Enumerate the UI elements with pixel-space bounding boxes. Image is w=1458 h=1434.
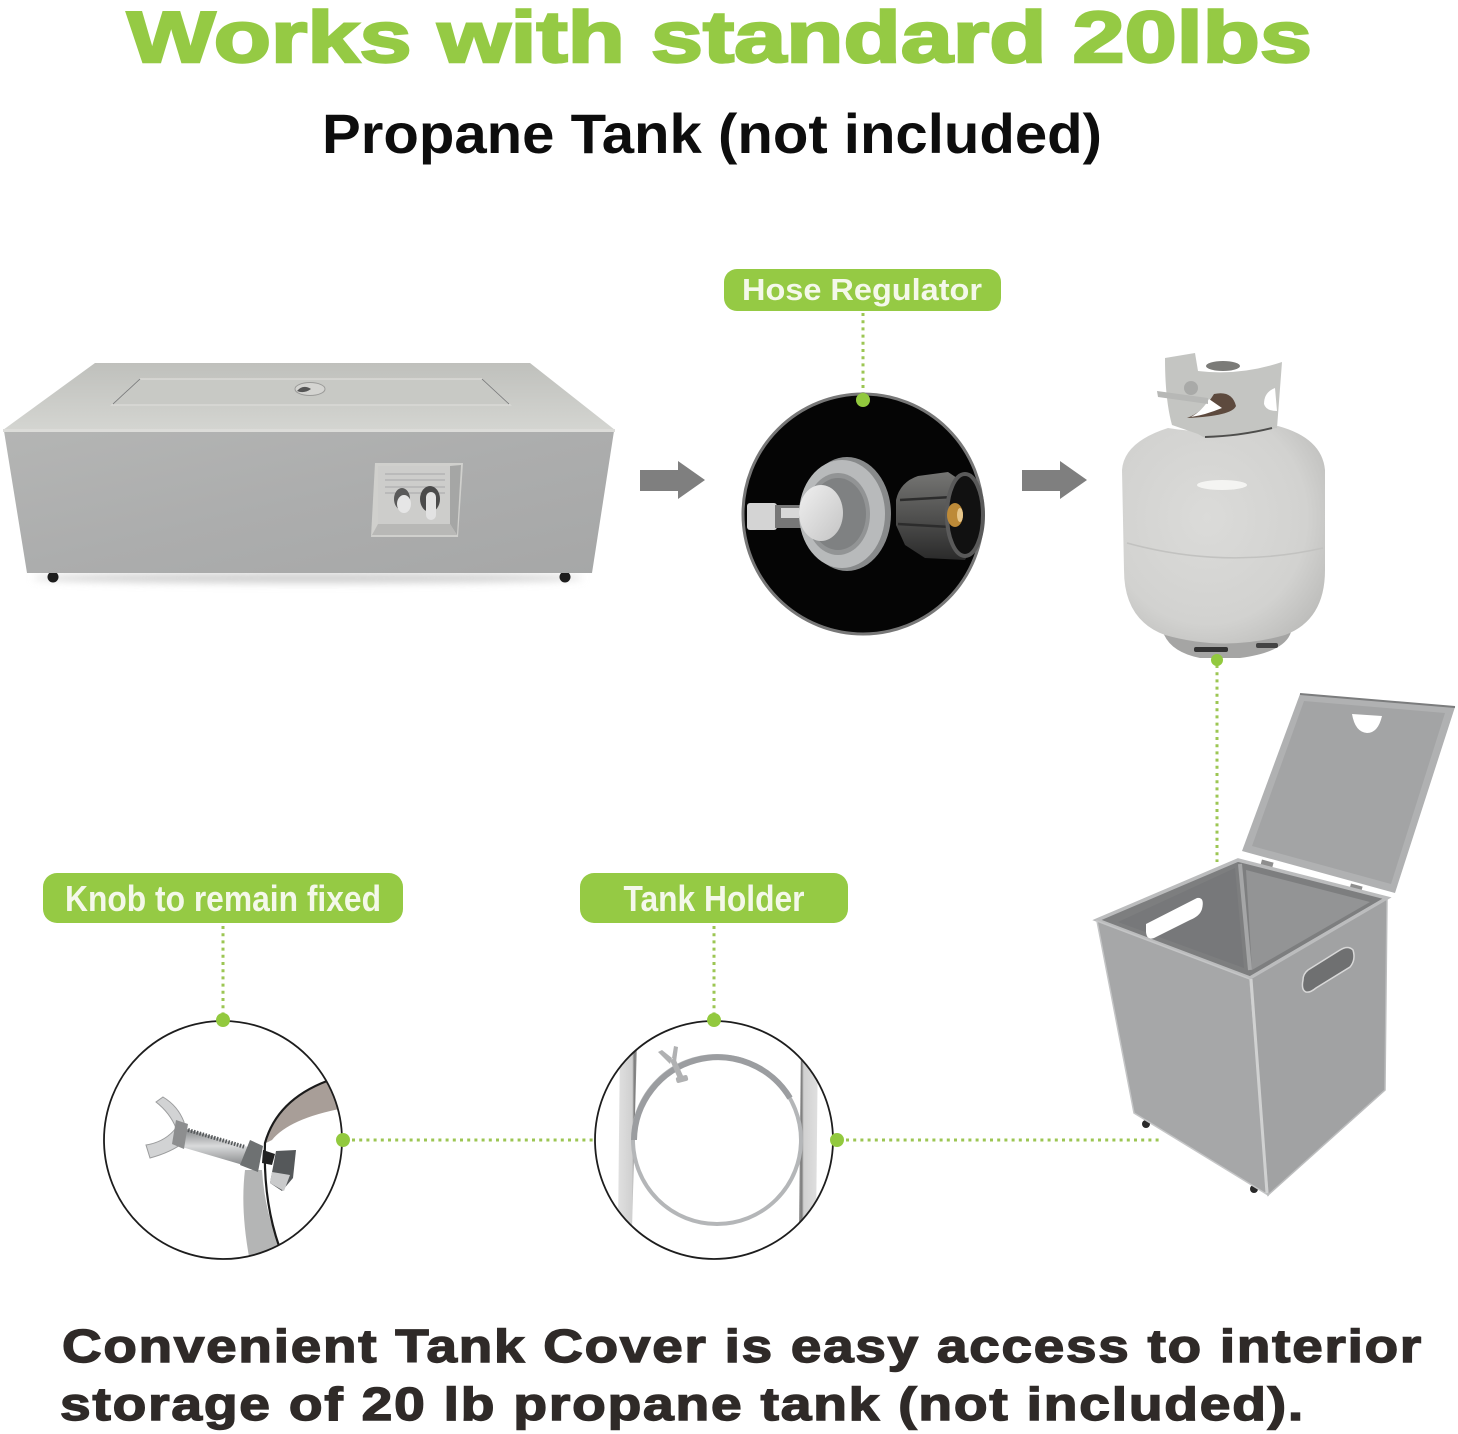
box right face bbox=[1250, 899, 1387, 1195]
fire pit table bbox=[3, 363, 615, 583]
connector: knob label to knob circle bbox=[222, 926, 224, 1016]
regulator body bbox=[799, 457, 891, 571]
connector: label to regulator bbox=[862, 313, 864, 398]
tank body bbox=[1122, 426, 1325, 644]
right handle slot bbox=[1302, 948, 1354, 992]
wing bolt bbox=[146, 1097, 296, 1191]
tank cover box bbox=[1097, 694, 1455, 1195]
hose fitting bbox=[747, 503, 803, 530]
subtitle: Propane Tank (not included): Propane Tank (not included) bbox=[322, 102, 1102, 165]
holder detail circle bbox=[595, 1021, 833, 1259]
control panel with knobs bbox=[371, 463, 463, 537]
knob detail circle bbox=[104, 1021, 345, 1262]
fire pit shadow bbox=[33, 573, 583, 583]
arrow: regulator to tank bbox=[1022, 461, 1087, 499]
arrow: fire pit to regulator bbox=[640, 461, 705, 499]
caption: storage of 20 lb propane tank (not included). bbox=[60, 1378, 1305, 1430]
label: Tank Holder: Tank Holder bbox=[624, 878, 804, 919]
label: Hose Regulator: Hose Regulator bbox=[742, 272, 982, 307]
strap bbox=[243, 1080, 337, 1256]
burner lid bbox=[112, 379, 510, 405]
open lid bbox=[1242, 694, 1455, 893]
fire pit front face bbox=[4, 431, 614, 573]
propane tank bbox=[1122, 353, 1325, 658]
collar openings bbox=[1157, 381, 1277, 437]
label: Hose Regulator bbox=[724, 269, 1001, 311]
circle outline bbox=[595, 1021, 833, 1259]
tank valve top bbox=[1206, 361, 1240, 371]
box left face bbox=[1097, 921, 1268, 1195]
caption bbox=[60, 1320, 1423, 1430]
caption: Convenient Tank Cover is easy access to interior bbox=[62, 1320, 1423, 1372]
tank base ring bbox=[1163, 632, 1291, 658]
fire pit feet bbox=[48, 572, 570, 582]
connector: knob circle to holder circle bbox=[352, 1138, 594, 1142]
wing screw bbox=[658, 1046, 689, 1083]
side bars bbox=[618, 1040, 818, 1230]
green dot: knob top bbox=[216, 1013, 230, 1027]
regulator photo circle bbox=[743, 394, 983, 634]
connector: holder label to holder circle bbox=[712, 926, 716, 1016]
casters bbox=[1142, 1120, 1258, 1193]
coupling nut bbox=[896, 472, 983, 560]
green dot: knob right bbox=[336, 1133, 350, 1147]
fire pit top surface bbox=[3, 363, 615, 430]
label: Knob to remain fixed: Knob to remain fixed bbox=[65, 878, 381, 919]
green dot: tank bbox=[1211, 654, 1223, 666]
green dot: regulator bbox=[856, 393, 870, 407]
green dot: holder right bbox=[830, 1133, 844, 1147]
holder ring bbox=[633, 1056, 801, 1224]
hinges bbox=[1260, 860, 1363, 892]
box interior bbox=[1097, 860, 1387, 978]
circle outline bbox=[104, 1021, 342, 1259]
tank collar bbox=[1165, 353, 1282, 438]
label: Tank Holder bbox=[580, 873, 848, 923]
green dot: holder top bbox=[707, 1013, 721, 1027]
title: Works with standard 20lbs: Works with standard 20lbs bbox=[127, 0, 1312, 78]
connector: tank to cover bbox=[1216, 665, 1218, 862]
connector: holder circle to cover bbox=[846, 1138, 1162, 1142]
